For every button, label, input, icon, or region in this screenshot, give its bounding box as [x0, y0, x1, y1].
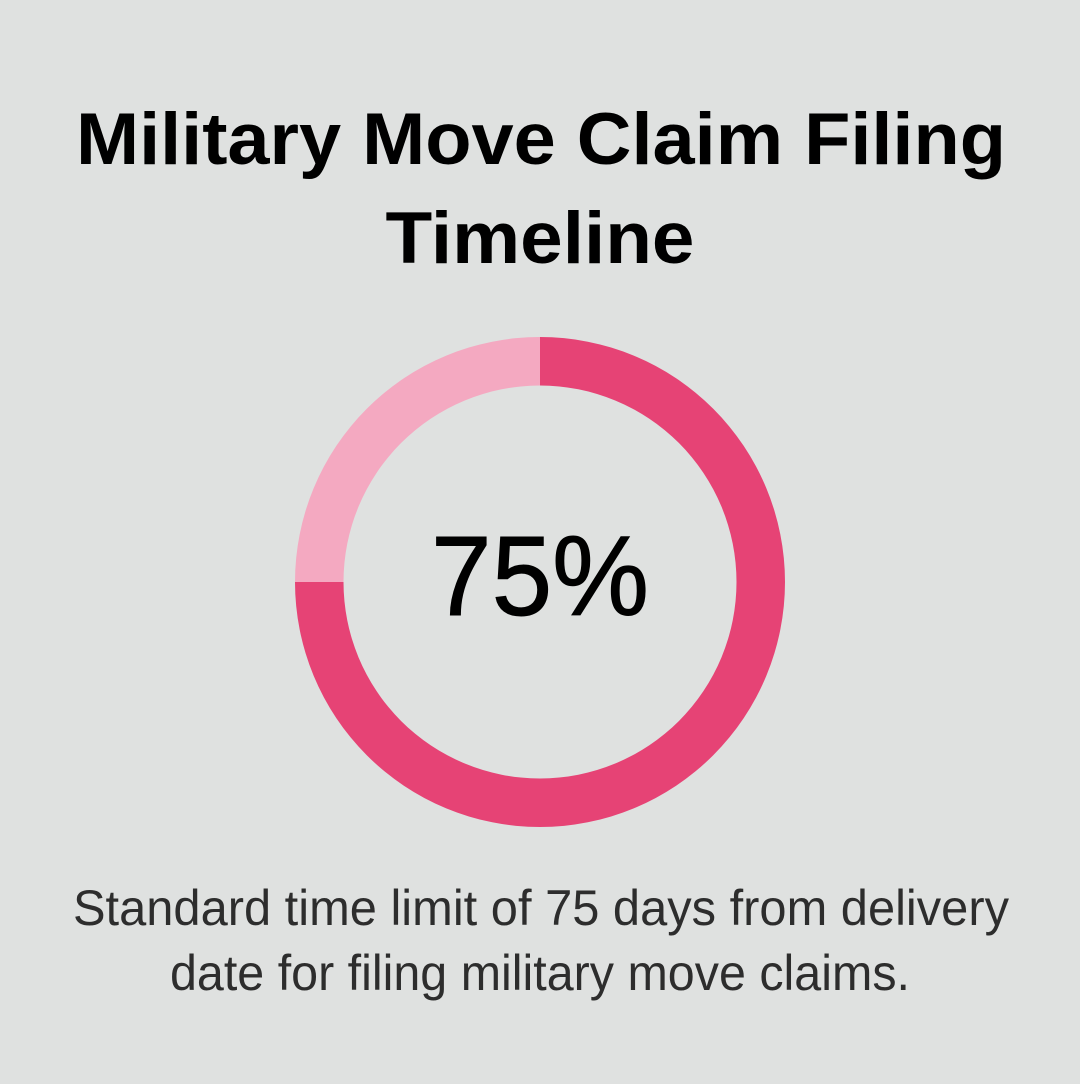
description [73, 880, 1009, 1001]
description: date for filing military move claims. [170, 945, 910, 1001]
center value: 75% [431, 513, 649, 639]
remaining quarter segment [295, 337, 540, 582]
title [76, 99, 1006, 279]
title: Military Move Claim Filing [76, 99, 1006, 180]
description: Standard time limit of 75 days from delivery [73, 880, 1009, 936]
title: Timeline [386, 198, 694, 279]
filled 75% segment [295, 337, 785, 827]
donut chart: 75% [295, 337, 785, 827]
